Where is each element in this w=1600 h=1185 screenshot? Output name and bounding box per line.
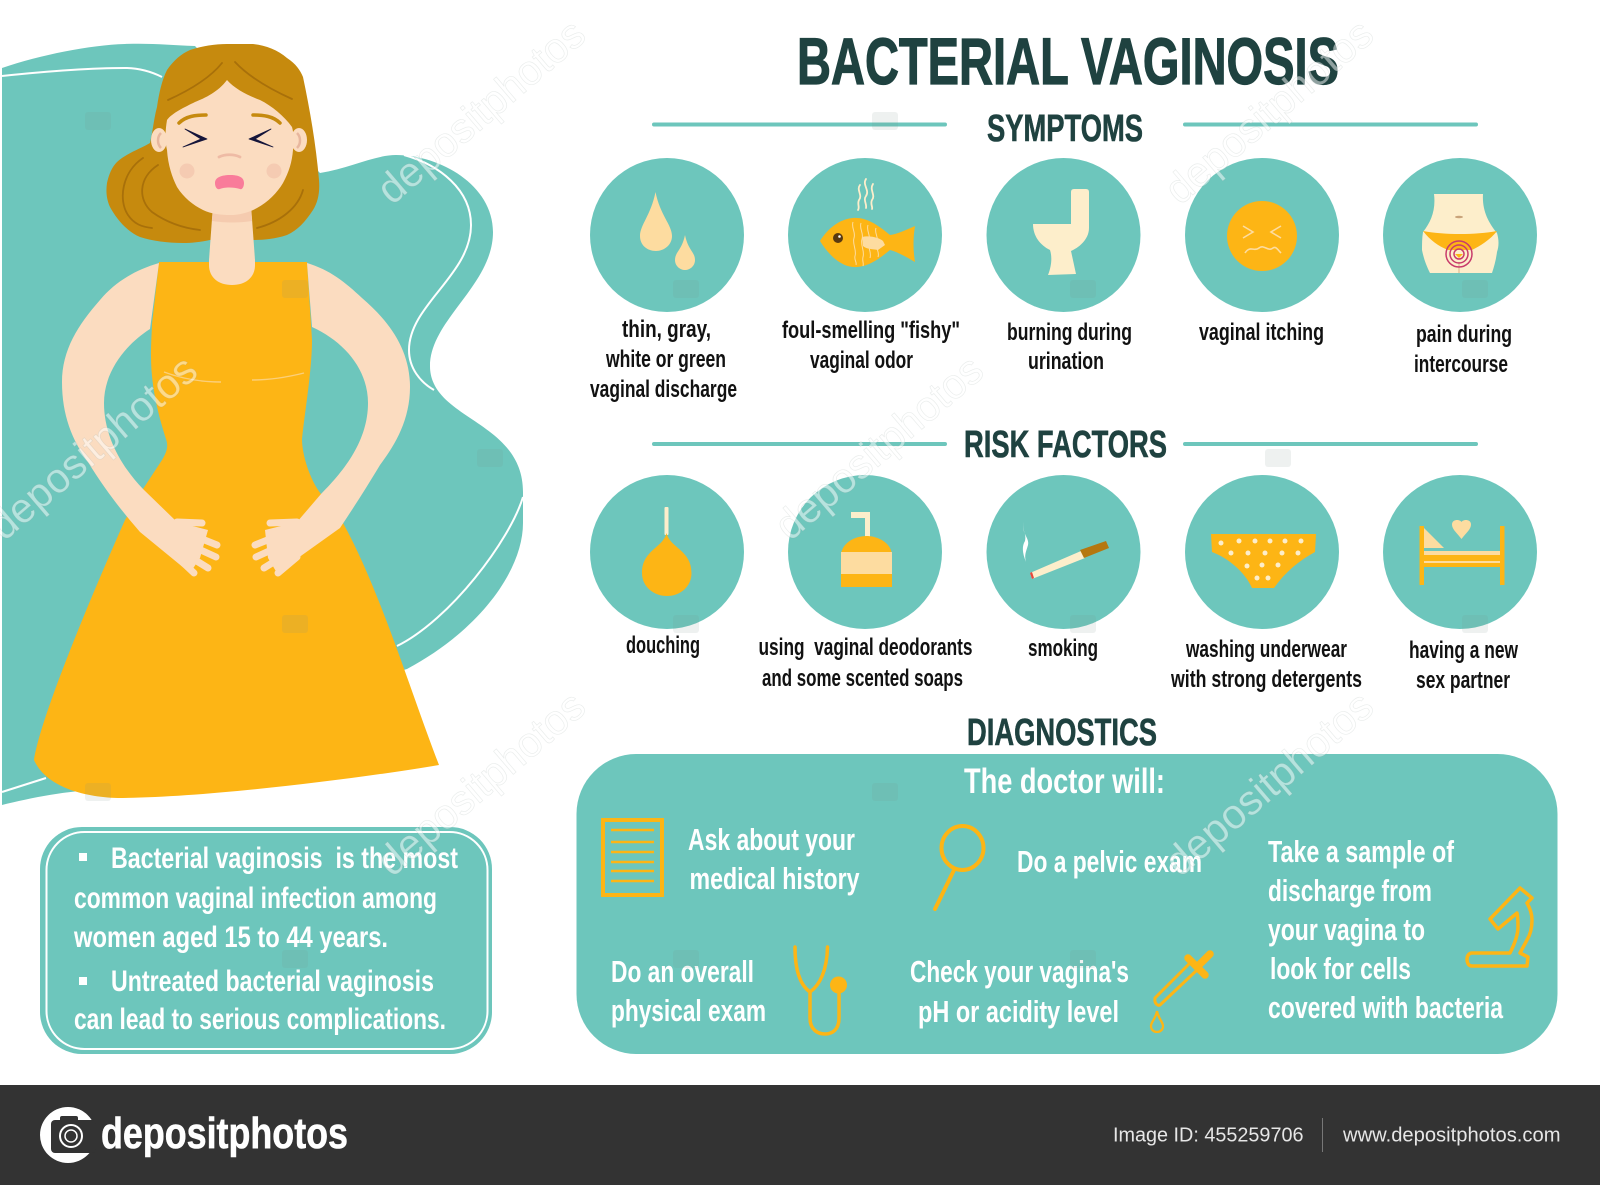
step: sample of discharge: Take a sample of	[1268, 834, 1455, 869]
symptom: burning during urination	[986, 158, 1140, 375]
step: sample of discharge: discharge from	[1268, 873, 1432, 908]
illustration: woman with abdominal pain	[34, 44, 439, 798]
step: pH check: pH or acidity level	[918, 994, 1119, 1029]
title: BACTERIAL VAGINOSIS	[797, 24, 1339, 98]
footer bar: depositphotos	[101, 1109, 348, 1158]
panel: facts: Bacterial vaginosis is the most	[111, 842, 458, 875]
step: sample of discharge	[1268, 834, 1532, 1025]
heading: symptoms	[652, 108, 1478, 150]
watermarks: depositphotos	[1155, 10, 1382, 213]
step: pH check	[910, 954, 1210, 1032]
panel: diagnostics	[576, 754, 1558, 1054]
panel: facts: common vaginal infection among	[74, 882, 437, 915]
panel: facts: Untreated bacterial vaginosis	[111, 965, 434, 998]
heading: risk factors: RISK FACTORS	[964, 424, 1167, 466]
watermarks: depositphotos	[367, 682, 594, 885]
step: pH check: Check your vagina's	[910, 954, 1129, 989]
panel: facts	[40, 827, 492, 1054]
risk: vaginal deodorants	[758, 475, 972, 692]
face	[166, 80, 294, 215]
symptom: discharge	[590, 158, 744, 403]
step: pelvic exam: Do a pelvic exam	[1017, 844, 1202, 879]
step: sample of discharge: covered with bacteria	[1268, 990, 1504, 1025]
symptom: itching: vaginal itching	[1199, 319, 1324, 346]
risk: douching: douching	[626, 632, 700, 659]
symptom: fishy odor	[782, 158, 960, 374]
risk: washing underwear: with strong detergents	[1170, 666, 1362, 693]
watermarks	[0, 10, 1382, 885]
symptom: discharge: thin, gray,	[622, 316, 711, 343]
step: pelvic exam	[935, 826, 1202, 909]
step: medical history	[603, 820, 860, 896]
symptom: discharge: white or green	[605, 346, 726, 373]
risk: smoking	[986, 475, 1140, 662]
heading: diagnostics: DIAGNOSTICS	[967, 712, 1157, 754]
dress	[34, 262, 439, 798]
footer bar: Image ID: 455259706	[1113, 1124, 1304, 1146]
risk: washing underwear	[1170, 475, 1362, 693]
symptom: pain during intercourse: pain during	[1416, 321, 1512, 348]
step: physical exam: physical exam	[611, 993, 766, 1028]
symptom: burning during urination: urination	[1028, 348, 1104, 375]
risk: vaginal deodorants: and some scented soaps	[762, 665, 963, 692]
neck	[209, 205, 255, 285]
step: physical exam	[611, 947, 847, 1034]
symptom: burning during urination: burning during	[1007, 319, 1132, 346]
heading: risk factors	[652, 424, 1478, 466]
risk: new sex partner: having a new	[1409, 637, 1518, 664]
hair	[106, 44, 319, 243]
icon: camera logo	[40, 1107, 96, 1163]
symptom: pain during intercourse: intercourse	[1414, 351, 1508, 378]
risk: new sex partner	[1383, 475, 1537, 694]
symptom: discharge: vaginal discharge	[590, 376, 737, 403]
symptom: fishy odor: foul-smelling "fishy"	[782, 317, 960, 344]
ears	[151, 128, 167, 152]
step: medical history: Ask about your	[688, 822, 855, 857]
symptom: itching	[1185, 158, 1339, 346]
panel: diagnostics: The doctor will:	[964, 762, 1165, 801]
step: sample of discharge: your vagina to	[1268, 912, 1425, 947]
step: physical exam: Do an overall	[611, 954, 754, 989]
symptom: pain during intercourse	[1383, 158, 1537, 378]
heading: symptoms: SYMPTOMS	[987, 108, 1143, 150]
panel: facts: women aged 15 to 44 years.	[73, 921, 388, 954]
watermark camera marks	[85, 112, 1488, 968]
footer bar	[0, 1085, 1600, 1185]
symptom: fishy odor: vaginal odor	[810, 347, 913, 374]
step: sample of discharge: look for cells	[1270, 951, 1411, 986]
step: medical history: medical history	[690, 861, 860, 896]
risk: smoking: smoking	[1028, 635, 1098, 662]
right arm	[265, 263, 410, 573]
watermarks: depositphotos	[765, 346, 992, 549]
background teal blob	[2, 44, 523, 805]
risk: vaginal deodorants: using vaginal deodorants	[758, 634, 972, 661]
risk: new sex partner: sex partner	[1416, 667, 1510, 694]
left arm	[62, 263, 208, 573]
risk: douching	[590, 475, 744, 659]
watermarks: depositphotos	[1155, 682, 1382, 885]
footer bar: www.depositphotos.com	[1342, 1124, 1560, 1146]
watermarks: depositphotos	[367, 10, 594, 213]
panel: facts: can lead to serious complications.	[74, 1003, 446, 1036]
risk: washing underwear: washing underwear	[1185, 636, 1347, 663]
